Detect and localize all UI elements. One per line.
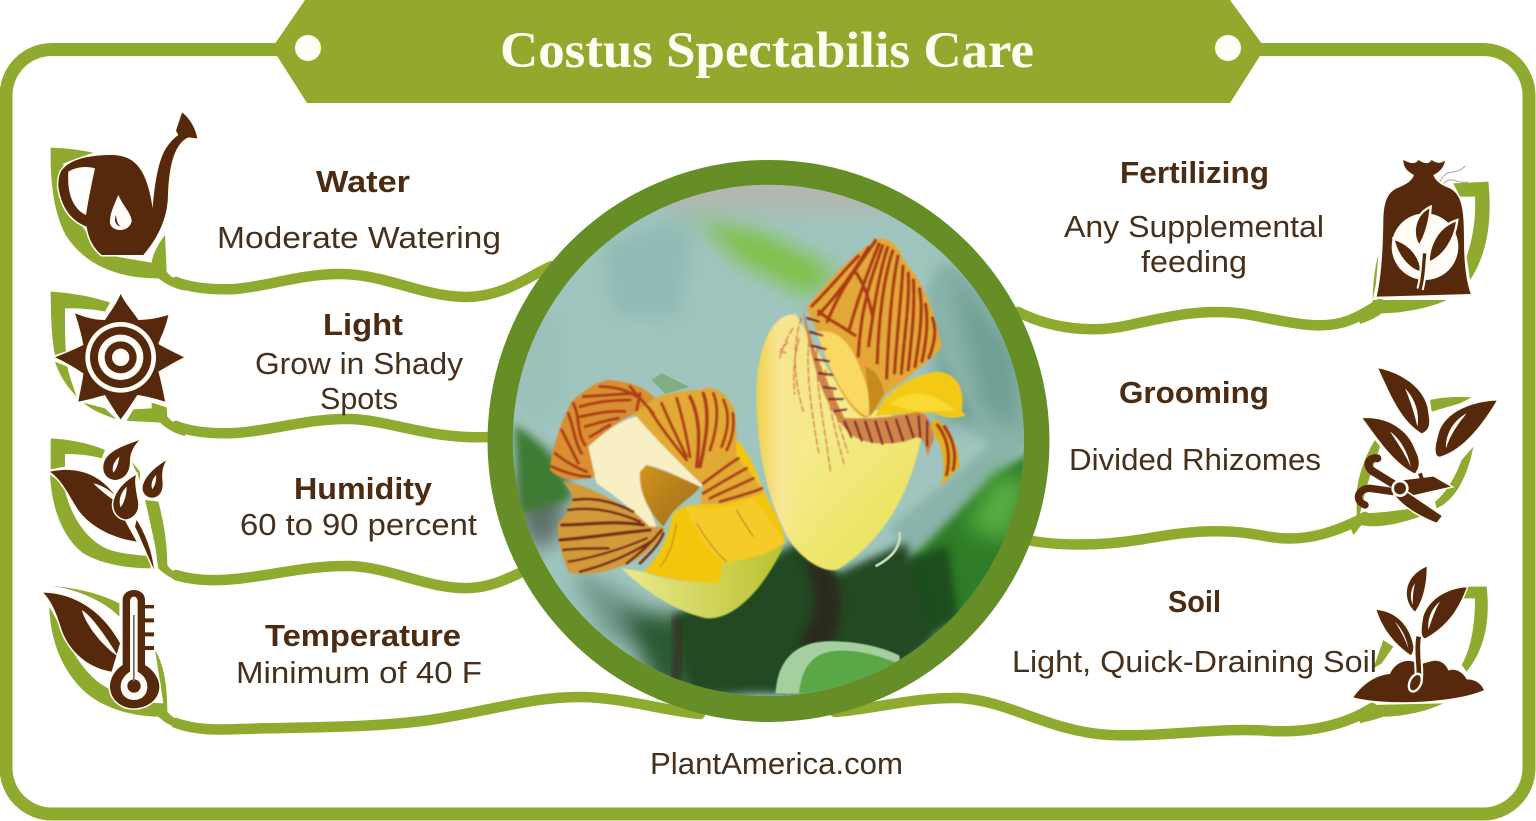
brown leaf <box>50 470 137 542</box>
flower photograph <box>512 184 1024 696</box>
connector wave: humidity <box>176 566 522 588</box>
central photo <box>500 170 1040 710</box>
soil <box>1353 661 1484 702</box>
leaf outline <box>1358 182 1490 324</box>
text block: light: Spots <box>320 381 398 416</box>
icon: humidity leaf and drops <box>50 438 187 583</box>
text block: soil: Light, Quick-Draining Soil <box>1012 644 1377 679</box>
thermometer <box>110 590 159 708</box>
title banner <box>272 0 1265 103</box>
connector wave: fertilizing <box>1018 304 1380 329</box>
text block: water: Water <box>316 164 410 199</box>
text block: fertilizing <box>1064 155 1324 279</box>
sun petals <box>55 294 184 419</box>
text block: grooming: Divided Rhizomes <box>1069 442 1321 477</box>
text block: fertilizing: Any Supplemental <box>1064 209 1324 244</box>
right bloom <box>757 238 966 570</box>
text block: humidity <box>240 471 477 542</box>
icon: sun <box>51 292 187 436</box>
text block: temperature <box>236 618 482 690</box>
text block: light <box>255 307 463 416</box>
title: Costus Spectabilis Care <box>500 23 1034 79</box>
connector wave: grooming <box>1032 517 1365 545</box>
text block: grooming <box>1069 375 1321 477</box>
icon: fertilizer bag <box>1358 160 1490 324</box>
leaf outline <box>1350 397 1473 535</box>
text block: fertilizing: Fertilizing <box>1120 155 1269 190</box>
text block: soil: Soil <box>1168 584 1221 619</box>
photo ring <box>500 173 1036 709</box>
connector wave: water <box>176 266 552 297</box>
shears <box>1369 458 1397 486</box>
leaf outline <box>1358 587 1488 723</box>
icon: seedling in soil <box>1353 567 1488 723</box>
leaves <box>1378 368 1429 433</box>
source credit: PlantAmerica.com <box>650 746 903 781</box>
icon: leaves and shears <box>1350 368 1497 535</box>
text block: light: Light <box>323 307 403 342</box>
connector wave: bottom right <box>835 698 1372 735</box>
text block: water: Moderate Watering <box>217 220 501 255</box>
drops <box>103 440 139 480</box>
text block: grooming: Grooming <box>1119 375 1269 410</box>
text block: water <box>217 164 501 255</box>
bag <box>1377 160 1471 297</box>
text block: light: Grow in Shady <box>255 346 463 381</box>
icon: watering can <box>51 113 197 291</box>
leaf outline <box>51 292 187 436</box>
left bloom <box>550 380 785 618</box>
text block: soil <box>1012 584 1377 679</box>
photo background <box>512 184 1024 696</box>
petal stripes <box>552 387 762 502</box>
leaf outline <box>49 586 187 730</box>
icon: thermometer and leaf <box>43 586 187 730</box>
brown leaf <box>43 593 120 672</box>
text block: temperature: Minimum of 40 F <box>236 655 482 690</box>
can body <box>58 113 197 255</box>
smell lines <box>1440 166 1468 183</box>
connector wave: temperature <box>176 697 700 729</box>
text block: fertilizing: feeding <box>1141 244 1247 279</box>
text block: humidity: 60 to 90 percent <box>240 507 477 542</box>
seedling leaves <box>1407 567 1427 612</box>
text block: humidity: Humidity <box>294 471 433 506</box>
connector wave: light <box>176 419 490 437</box>
leaf outline <box>50 438 187 583</box>
leaf outline <box>51 148 187 291</box>
text block: temperature: Temperature <box>265 618 461 653</box>
